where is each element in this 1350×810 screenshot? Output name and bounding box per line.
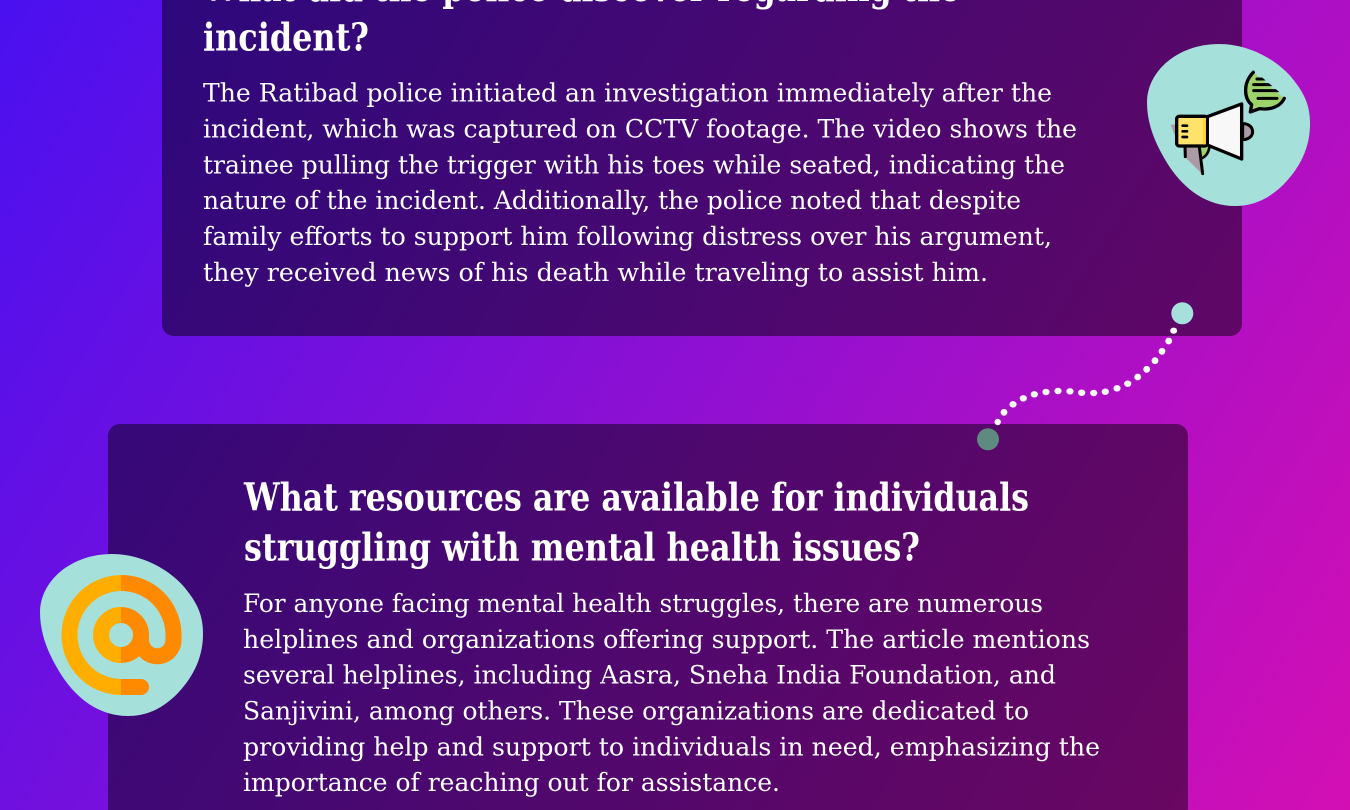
body text: mental health resources: several helplines, including Aasra, Sneha India Foundation, and bbox=[243, 661, 1056, 691]
body text: police investigation bbox=[203, 79, 1077, 288]
panel: police investigation bbox=[162, 0, 1242, 336]
panel background bbox=[108, 424, 1188, 810]
body text: mental health resources bbox=[243, 589, 1100, 798]
heading: police discovery bbox=[202, 0, 960, 60]
heading: mental health resources bbox=[243, 475, 1029, 570]
icon: speech bubble bbox=[1246, 72, 1284, 112]
body text: police investigation: incident, which was captured on CCTV footage. The video shows the bbox=[203, 114, 1077, 144]
body text: police investigation: nature of the incident. Additionally, the police noted that despite bbox=[203, 186, 1021, 216]
body text: mental health resources: providing help and support to individuals in need, emphasizing the bbox=[243, 732, 1100, 762]
panel: mental health resources bbox=[108, 424, 1188, 810]
icon: megaphone bbox=[1171, 104, 1253, 174]
body text: mental health resources: helplines and organizations offering support. The article mentions bbox=[243, 625, 1090, 655]
body text: police investigation: The Ratibad police initiated an investigation immediately after the bbox=[203, 79, 1052, 109]
body text: police investigation: they received news of his death while traveling to assist him. bbox=[203, 258, 988, 288]
body text: mental health resources: Sanjivini, among others. These organizations are dedicated to bbox=[243, 696, 1029, 726]
body text: mental health resources: For anyone facing mental health struggles, there are numerous bbox=[243, 589, 1043, 619]
heading: police discovery: incident? bbox=[203, 15, 369, 60]
body text: police investigation: trainee pulling the trigger with his toes while seated, indicating the bbox=[203, 150, 1065, 180]
icon: at sign on teal blob bbox=[40, 554, 203, 716]
heading: mental health resources: struggling with mental health issues? bbox=[244, 525, 920, 570]
body text: police investigation: family efforts to support him following distress over his argument, bbox=[203, 222, 1052, 252]
body text: mental health resources: importance of reaching out for assistance. bbox=[243, 768, 780, 798]
panel background bbox=[162, 0, 1242, 336]
connector: dotted line with end points bbox=[977, 302, 1193, 450]
icon: megaphone on teal blob bbox=[1147, 44, 1310, 206]
heading: mental health resources: What resources are available for individuals bbox=[243, 475, 1029, 520]
